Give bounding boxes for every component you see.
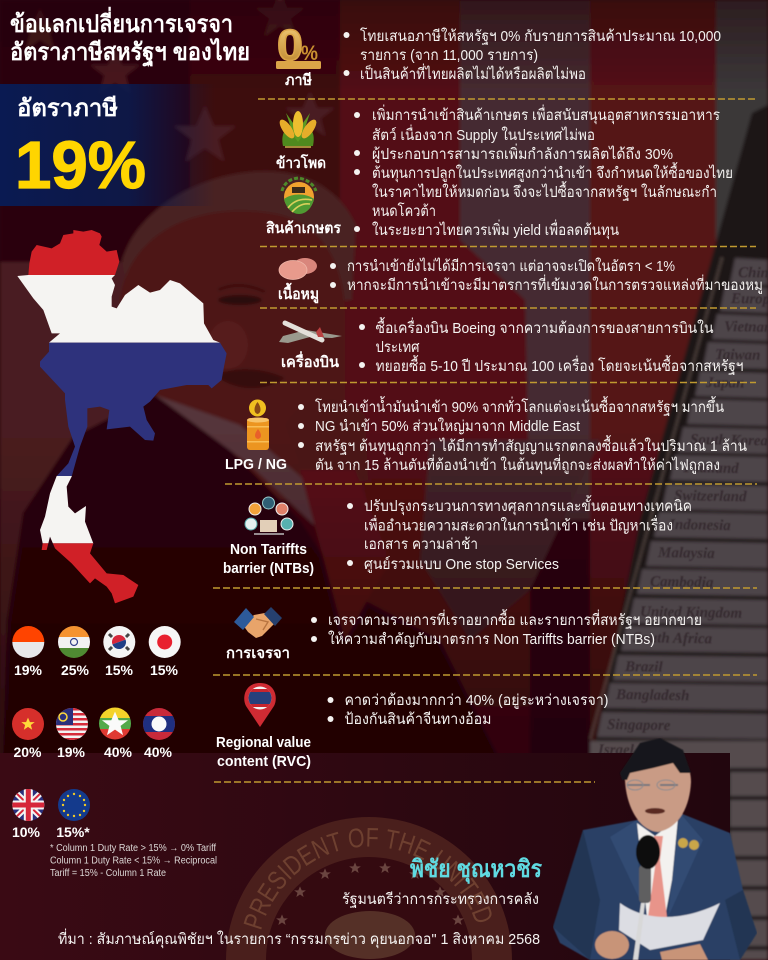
icon: gold zero percent — [276, 21, 321, 70]
footnote on EU tariff: Tariff = 15% - Column 1 Rate — [50, 868, 166, 879]
panel: regional value content — [216, 683, 608, 770]
panel: corn and agricultural goods: ในราคาไทยให้หมดก่อน จึงจะไปซื้อจากสหรัฐฯ ในลักษณะกำ — [372, 181, 717, 201]
panel: non-tariff barriers: เอกสาร ความล่าช้า — [364, 536, 478, 553]
flag: South Korea 15% — [103, 626, 135, 678]
flag: European Union 15%* — [56, 789, 90, 840]
panel: corn and agricultural goods: ข้าวโพด — [276, 153, 326, 172]
flag: Vietnam 20%: 20% — [13, 744, 42, 760]
panel: regional value content: content (RVC) — [217, 753, 311, 770]
panel: corn and agricultural goods: สินค้าเกษตร — [266, 219, 342, 237]
title — [10, 6, 250, 68]
flag: India 25%: 25% — [61, 662, 90, 678]
panel: non-tariff barriers: ปรับปรุงกระบวนการทางศุลกากรและขั้นตอนทางเทคนิค — [364, 495, 692, 516]
panel: tariff rate 19%: อัตราภาษี — [17, 95, 118, 122]
panel: negotiation: การเจรจา — [226, 645, 290, 662]
icon: gold zero percent: 0 — [277, 21, 303, 70]
flag: Indonesia 19%: 19% — [14, 662, 43, 678]
background: flag, portrait and country list photo: Taiwan — [715, 347, 761, 364]
portrait: Finance Minister speaking at a microphone — [553, 738, 757, 960]
shirt collar — [155, 395, 340, 540]
icon: handshake — [234, 607, 282, 638]
title: ข้อแลกเปลี่ยนการเจรจา — [10, 6, 233, 38]
country list notebook — [500, 105, 768, 960]
panel: tariff rate 19% — [0, 84, 215, 206]
panel: pork — [278, 257, 763, 304]
flag: Vietnam 20% — [12, 708, 44, 760]
icon: Thai flag map pin — [244, 683, 276, 727]
panel: LPG / NG: โทยนำเข้าน้ำมันนำเข้า 90% จากทั่วโลกแต่จะเน้นซื้อจากสหรัฐฯ มากขึ้น — [315, 396, 724, 416]
suit jacket — [553, 813, 757, 960]
background: flag, portrait and country list photo: Israel — [597, 742, 635, 759]
icon: gold zero percent: % — [301, 42, 318, 65]
panel: non-tariff barriers — [223, 495, 692, 577]
panel: regional value content: Regional value — [216, 734, 311, 751]
head and hair — [625, 748, 691, 832]
presidential podium seal: PRESIDENT OF THE UNITED — [244, 828, 492, 930]
right strip rows below country list — [590, 741, 768, 960]
paper — [619, 903, 720, 950]
flag: Laos 40% — [143, 708, 176, 760]
minister name and title: พิชัย ชุณหวชิร — [410, 856, 542, 885]
panel: regional value content: คาดว่าต้องมากกว่า 40% (อยู่ระหว่างเจรจา) — [344, 692, 608, 709]
flag: Malaysia 19% — [56, 708, 89, 760]
flags and tariff rates by country — [12, 626, 181, 840]
background: flag, portrait and country list photo: Thailand — [682, 460, 739, 477]
background: flag, portrait and country list photo: Singapore — [607, 717, 671, 734]
panel: aircraft: ซื้อเครื่องบิน Boeing จากความต้องการของสายการบินใน — [376, 317, 714, 337]
background: flag, portrait and country list photo: Malaysia — [657, 545, 715, 562]
icon: airplane — [279, 323, 342, 343]
panel: LPG / NG: LPG / NG — [225, 456, 287, 473]
panel: corn and agricultural goods: ผู้ประกอบการสามารถเพิ่มกำลังการผลิตได้ถึง 30% — [372, 143, 673, 163]
shirt and tie — [637, 818, 678, 917]
flag: Myanmar 40%: 40% — [104, 744, 133, 760]
panel: tariff rate 19%: 19% — [15, 128, 146, 203]
background: flag, portrait and country list photo: Indonesia — [668, 517, 731, 534]
map of Thailand in flag colours — [18, 230, 226, 604]
panel: corn and agricultural goods: ต้นทุนการปลูกในประเทศสูงกว่านำเข้า จึงกำหนดให้ซื้อของไทย — [372, 162, 733, 183]
background: flag, portrait and country list photo: Brazil — [624, 659, 664, 676]
minister name and title: รัฐมนตรีว่าการกระทรวงการคลัง — [342, 891, 539, 908]
hand near mouth — [285, 399, 368, 490]
background: flag, portrait and country list photo: Bangladesh — [615, 687, 690, 704]
footnote on EU tariff: Column 1 Duty Rate < 15% → Reciprocal — [50, 856, 217, 866]
flag: Myanmar 40% — [99, 707, 133, 760]
panel: corn and agricultural goods: หนดโควต้า — [372, 202, 436, 220]
panel: LPG / NG: ตัน จาก 15 ล้านตันที่ต้องนำเข้า ในต้นทุนที่ถูกจะส่งผลทำให้ค่าไฟถูกลง — [315, 454, 720, 475]
flag: Japan 15%: 15% — [150, 662, 179, 678]
flag: Indonesia 19% — [12, 626, 45, 678]
panel: negotiation: ให้ความสำคัญกับมาตรการ Non Tariffts barrier (NTBs) — [328, 630, 655, 648]
panel: corn and agricultural goods: สัตว์ เนื่องจาก Supply ในประเทศไม่พอ — [372, 124, 595, 144]
panel: pork: การนำเข้ายังไม่ได้มีการเจรจา แต่อาจจะเปิดในอัตรา < 1% — [347, 257, 675, 275]
suit — [0, 395, 500, 960]
icon: pork — [279, 258, 317, 280]
footnote on EU tariff: * Column 1 Duty Rate > 15% → 0% Tariff — [50, 843, 216, 854]
background: flag, portrait and country list photo: Switzerland — [674, 488, 747, 505]
panel: tariff: โทยเสนอภาษีให้สหรัฐฯ 0% กับรายการสินค้าประมาณ 10,000 — [360, 27, 721, 45]
panel: negotiation: เจรจาตามรายการที่เราอยากซื้อ และรายการที่สหรัฐฯ อยากขาย — [328, 609, 702, 629]
panel: corn and agricultural goods: ในระยะยาวไทยควรเพิ่ม yield เพื่อลดต้นทุน — [372, 219, 619, 240]
microphone — [633, 903, 645, 960]
panel: non-tariff barriers: เพื่ออำนวยความสะดวกในการนำเข้า เช่น ปัญหาเรื่อง — [364, 514, 673, 534]
panel: LPG / NG: NG นำเข้า 50% ส่วนใหญ่มาจาก Middle East — [315, 417, 581, 435]
panel: tariff: ภาษี — [285, 72, 312, 89]
panel: tariff: รายการ (จาก 11,000 รายการ) — [360, 47, 538, 64]
panel: pork: เนื้อหมู — [278, 282, 319, 304]
panel: corn and agricultural goods: เพิ่มการนำเข้าสินค้าเกษตร เพื่อสนับสนุนอุตสาหกรรมอาหาร — [372, 104, 720, 125]
panel: aircraft: เครื่องบิน — [281, 351, 340, 371]
hands — [595, 931, 629, 959]
panel: tariff — [276, 21, 721, 89]
background: flag, portrait and country list photo: Cambodia — [650, 574, 714, 591]
face — [120, 211, 345, 500]
flag: United Kingdom 10% — [12, 789, 45, 840]
minister name and title — [342, 856, 542, 908]
flag: Laos 40%: 40% — [144, 744, 173, 760]
panel: negotiation — [226, 607, 702, 662]
panel: aircraft: ประเทศ — [376, 339, 420, 356]
panel: corn and agricultural goods — [266, 104, 733, 240]
panel: non-tariff barriers: ศูนย์รวมแบบ One stop Services — [364, 556, 559, 573]
panel: aircraft — [279, 317, 744, 375]
left-of-body lighter backdrop — [0, 262, 140, 800]
background: flag, portrait and country list photo: South Korea — [690, 432, 768, 449]
footnote on EU tariff — [50, 843, 217, 879]
title: อัตราภาษีสหรัฐฯ ของไทย — [10, 37, 250, 68]
panel: regional value content: ป้องกันสินค้าจีนทางอ้อม — [344, 711, 492, 728]
panel: tariff: เป็นสินค้าที่ไทยผลิตไม่ได้หรือผลิตไม่พอ — [360, 63, 586, 83]
panel: non-tariff barriers: Non Tariffts — [230, 541, 307, 558]
panel: aircraft: ทยอยซื้อ 5-10 ปี ประมาณ 100 เครื่อง โดยจะเน้นซื้อจากสหรัฐฯ — [376, 355, 744, 375]
flag: India 25% — [58, 626, 91, 678]
hair — [122, 171, 356, 320]
icon: corn — [277, 111, 319, 147]
flag: South Korea 15%: 15% — [105, 662, 134, 678]
panel: non-tariff barriers: barrier (NTBs) — [223, 560, 314, 577]
pins — [678, 838, 688, 848]
source line: ที่มา : สัมภาษณ์คุณพิชัยฯ ในรายการ “กรรมกรข่าว คุยนอกจอ" 1 สิงหาคม 2568 — [58, 928, 540, 949]
background: flag, portrait and country list photo: United Kingdom — [640, 604, 742, 622]
icon: farm — [282, 178, 316, 214]
icon: trade documents cluster — [245, 497, 293, 534]
icon: oil barrel with flame — [247, 400, 269, 450]
flag: Japan 15% — [149, 626, 181, 678]
panel: LPG / NG — [225, 396, 747, 475]
flag: United Kingdom 10%: 10% — [12, 824, 41, 840]
presidential podium seal — [0, 753, 730, 960]
background: flag, portrait and country list photo: Japan — [705, 375, 745, 392]
flag: European Union 15%*: 15%* — [56, 824, 90, 840]
flag: Malaysia 19%: 19% — [57, 744, 86, 760]
background: flag, portrait and country list photo: South Africa — [633, 630, 713, 647]
